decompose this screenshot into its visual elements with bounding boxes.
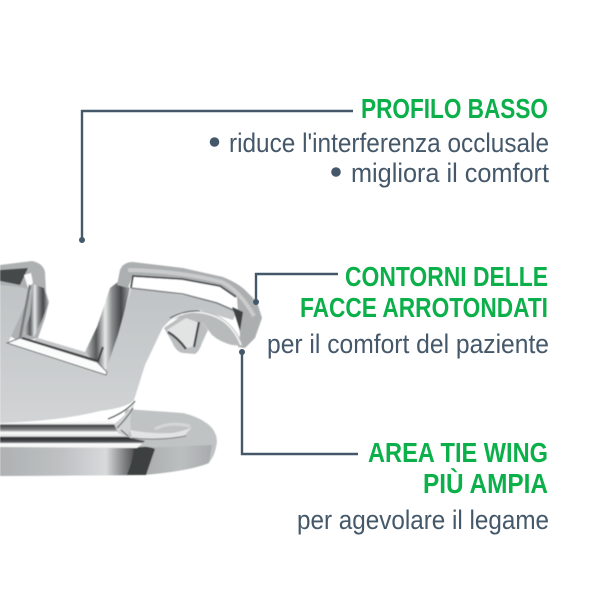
- left wing lower shadow: [20, 285, 30, 338]
- heading: area tie wing line 1: AREA TIE WING: [368, 437, 548, 468]
- channel lower glint: [131, 288, 235, 311]
- channel: [131, 277, 236, 306]
- right wing side slot: [85, 282, 130, 372]
- small hook dark strokes: [168, 322, 199, 349]
- bullet: interferenza: [210, 137, 219, 147]
- text: migliora comfort: migliora il comfort: [351, 158, 550, 188]
- dark inner corner: [232, 307, 243, 331]
- notch back wall: [30, 285, 120, 362]
- heading: area tie wing line 2: PIÙ AMPIA: [423, 468, 548, 499]
- small hook: [164, 315, 208, 354]
- notch dark line: [22, 338, 103, 361]
- left wing rim: [0, 261, 49, 342]
- body front face: [0, 285, 237, 423]
- heading: contorni line 1: CONTORNI DELLE: [345, 261, 548, 292]
- leader line: profilo basso: [79, 111, 353, 243]
- text: comfort paziente: per il comfort del paziente: [267, 329, 549, 359]
- bracket base flange: [0, 409, 217, 476]
- large hook crescent: [163, 310, 243, 346]
- right wing rim: [117, 262, 262, 348]
- heading: profilo basso: PROFILO BASSO: [361, 93, 548, 124]
- rim dark inner edge: [131, 276, 236, 297]
- bracket stem junction: [108, 400, 136, 437]
- leader line: area tie wing: [239, 349, 358, 454]
- crescent glint: [165, 312, 241, 345]
- heading: contorni line 2: FACCE ARROTONDATI: [300, 292, 548, 323]
- rim lighter inner band: [128, 270, 254, 316]
- notch highlight strip: [7, 338, 107, 375]
- leader line: contorni: [253, 274, 338, 305]
- illustration: metal bracket: [0, 261, 262, 476]
- small hook shine: [167, 318, 199, 348]
- bullet: comfort: [331, 167, 341, 177]
- bracket shiny stripes: [0, 421, 145, 448]
- text: riduce interferenza: riduce l'interferenza occlusale: [229, 128, 549, 158]
- text: agevolare legame: per agevolare il legame: [297, 505, 549, 535]
